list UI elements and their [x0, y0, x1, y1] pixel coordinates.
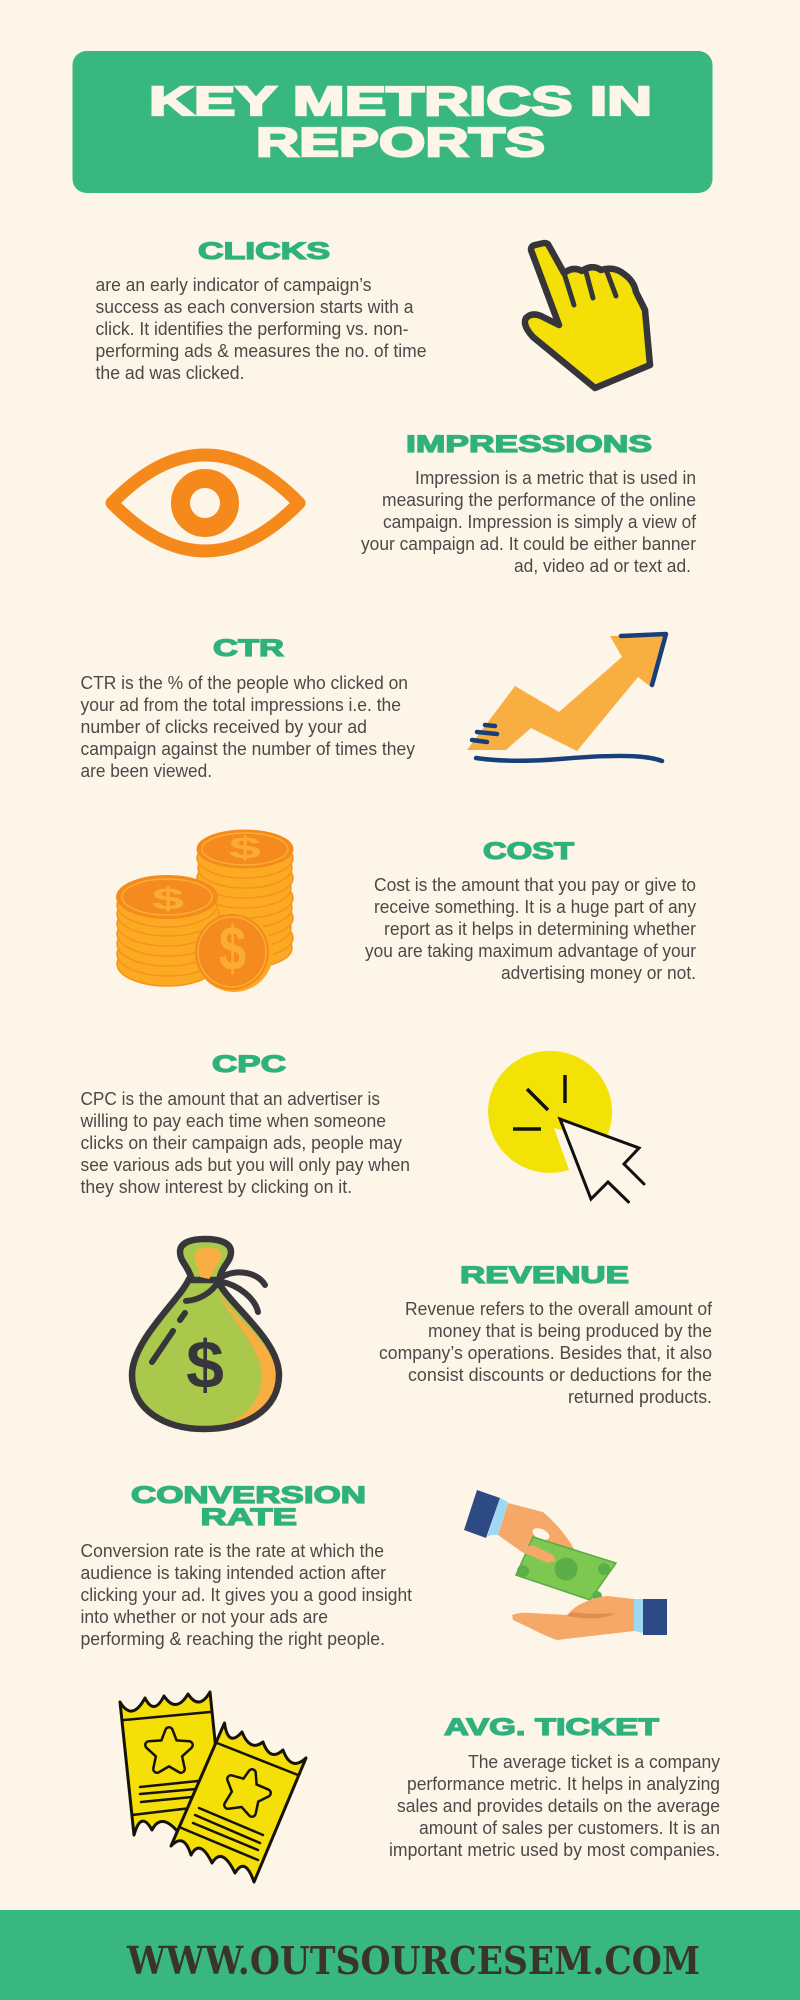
- text: impressions description: ad, video ad or text ad.: [514, 556, 691, 576]
- icon: rising arrow: [467, 634, 666, 761]
- heading: conversion rate: RATE: [200, 1504, 297, 1531]
- text: cost description: report as it helps in determining whether: [384, 919, 696, 939]
- text: cost description: advertising money or not.: [501, 963, 696, 983]
- text: impressions description: your campaign ad. It could be either banner: [361, 534, 696, 554]
- text: ctr description: [80, 673, 415, 781]
- text: impressions description: measuring the performance of the online: [382, 490, 696, 510]
- icon: click cursor on yellow pie: [488, 1051, 644, 1202]
- icon: money bag: [132, 1239, 279, 1429]
- text: clicks description: [96, 275, 426, 383]
- text: revenue description: returned products.: [568, 1387, 712, 1407]
- text: avg ticket description: important metric used by most companies.: [389, 1840, 720, 1860]
- text: cost description: Cost is the amount that you pay or give to: [374, 875, 696, 895]
- text: conversion rate description: into whether or not your ads are: [80, 1607, 328, 1627]
- text: conversion rate description: performing & reaching the right people.: [80, 1629, 385, 1649]
- icon: eye: [112, 455, 299, 551]
- heading: cpc: CPC: [212, 1051, 286, 1078]
- text: cost description: receive something. It is a huge part of any: [374, 897, 696, 917]
- icon: hands exchanging money: [464, 1490, 667, 1640]
- text: conversion rate description: audience is taking intended action after: [80, 1563, 386, 1583]
- title text: [149, 78, 652, 165]
- text: conversion rate description: [80, 1541, 412, 1649]
- text: cpc description: [80, 1089, 410, 1197]
- text: impressions description: Impression is a metric that is used in: [415, 468, 696, 488]
- text: clicks description: are an early indicator of campaign’s: [96, 275, 372, 295]
- text: cpc description: see various ads but you will only pay when: [80, 1155, 410, 1175]
- icon: tickets: [120, 1692, 306, 1882]
- heading: revenue: REVENUE: [460, 1262, 629, 1289]
- icon: coin stacks: $: [229, 830, 261, 864]
- heading: clicks: CLICKS: [198, 238, 330, 265]
- panel: revenue: [132, 1239, 713, 1429]
- panel: cost: [116, 830, 696, 992]
- text: clicks description: the ad was clicked.: [96, 363, 244, 383]
- text: conversion rate description: Conversion rate is the rate at which the: [80, 1541, 384, 1561]
- title text: KEY METRICS IN: [149, 78, 652, 124]
- text: avg ticket description: amount of sales per customers. It is an: [419, 1818, 720, 1838]
- text: ctr description: your ad from the total impressions i.e. the: [80, 695, 401, 715]
- heading: cost: COST: [483, 838, 574, 865]
- text: cpc description: clicks on their campaign ads, people may: [80, 1133, 402, 1153]
- text: revenue description: company’s operations. Besides that, it also: [379, 1343, 712, 1363]
- text: ctr description: number of clicks received by your ad: [80, 717, 367, 737]
- text: conversion rate description: clicking your ad. It gives you a good insight: [80, 1585, 412, 1605]
- text: avg ticket description: sales and provides details on the average: [397, 1796, 720, 1816]
- icon: pointing hand cursor: [525, 243, 650, 388]
- icon: coin stacks: $: [152, 881, 184, 915]
- text: revenue description: money that is being produced by the: [428, 1321, 712, 1341]
- icon: coin stacks: $: [219, 915, 246, 984]
- text: avg ticket description: The average ticket is a company: [468, 1752, 720, 1772]
- heading: conversion rate: CONVERSION: [131, 1482, 366, 1509]
- footer band: [0, 1910, 800, 2000]
- text: cost description: [365, 875, 696, 983]
- text: cpc description: willing to pay each time when someone: [80, 1111, 386, 1131]
- text: cost description: you are taking maximum advantage of your: [365, 941, 696, 961]
- panel: conversion rate: [80, 1482, 667, 1649]
- text: revenue description: [379, 1299, 713, 1407]
- text: revenue description: Revenue refers to the overall amount of: [405, 1299, 713, 1319]
- footer website url: WWW.OUTSOURCESEM.COM: [126, 1938, 700, 1983]
- text: avg ticket description: [389, 1752, 720, 1860]
- text: ctr description: CTR is the % of the people who clicked on: [80, 673, 408, 693]
- text: clicks description: click. It identifies the performing vs. non-: [96, 319, 408, 339]
- icon: coin stacks: [116, 830, 294, 992]
- panel: clicks: [96, 238, 650, 388]
- text: ctr description: campaign against the number of times they: [80, 739, 415, 759]
- text: clicks description: success as each conversion starts with a: [96, 297, 414, 317]
- text: impressions description: campaign. Impression is simply a view of: [383, 512, 697, 532]
- heading: ctr: CTR: [213, 635, 284, 662]
- panel: avg ticket: [120, 1692, 720, 1882]
- text: revenue description: consist discounts or deductions for the: [408, 1365, 712, 1385]
- heading: avg ticket: AVG. TICKET: [444, 1714, 659, 1741]
- text: cpc description: they show interest by clicking on it.: [80, 1177, 352, 1197]
- text: impressions description: [361, 468, 697, 576]
- heading: impressions: IMPRESSIONS: [406, 431, 652, 458]
- title banner: [72, 51, 712, 193]
- title text: REPORTS: [256, 119, 545, 165]
- heading: conversion rate: [131, 1482, 366, 1531]
- panel: impressions: [112, 431, 697, 576]
- text: ctr description: are been viewed.: [80, 761, 212, 781]
- text: avg ticket description: performance metric. It helps in analyzing: [407, 1774, 720, 1794]
- panel: ctr: [80, 634, 666, 781]
- text: cpc description: CPC is the amount that an advertiser is: [80, 1089, 380, 1109]
- panel: cpc: [80, 1051, 644, 1202]
- icon: money bag: $: [186, 1327, 224, 1403]
- text: clicks description: performing ads & measures the no. of time: [96, 341, 426, 361]
